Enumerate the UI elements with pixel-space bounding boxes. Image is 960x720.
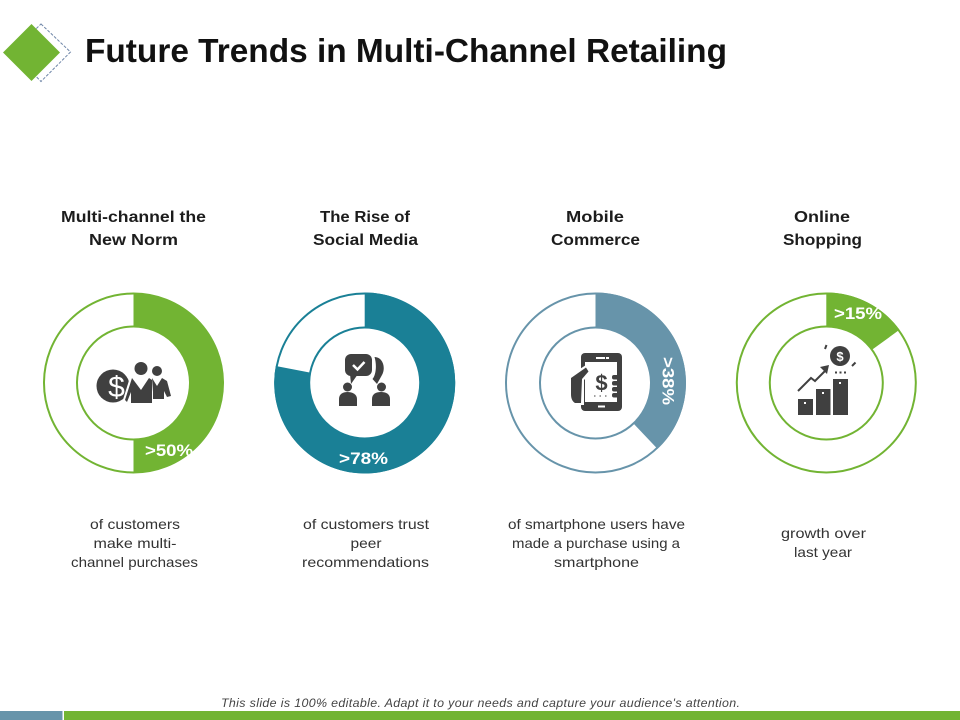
heading: multi-channel: New Norm xyxy=(89,232,178,249)
icon: chat and two people xyxy=(339,354,390,406)
text: mobile commerce description: of smartphone users have xyxy=(508,516,685,532)
text: social media description: recommendations xyxy=(302,554,429,570)
panel: multi-channel xyxy=(44,209,224,570)
heading: online shopping: Shopping xyxy=(783,232,862,249)
donut: 38 percent xyxy=(506,292,686,472)
icon: growth chart and coin xyxy=(798,345,856,415)
heading: mobile commerce xyxy=(551,209,640,249)
donut: 15 percent: >15% xyxy=(834,304,882,323)
icon: dollar and people xyxy=(96,362,171,405)
icon: title diamond xyxy=(3,24,70,82)
heading: social media: Social Media xyxy=(313,232,418,249)
icon: dollar and people: $ xyxy=(108,371,125,404)
footer note: This slide is 100% editable. Adapt it to your needs and capture your audience's attention. xyxy=(221,696,740,710)
text: social media description xyxy=(302,516,429,570)
text: multi-channel description xyxy=(71,516,198,570)
heading: multi-channel xyxy=(61,209,206,249)
icon: phone payment: $ xyxy=(595,370,608,396)
text: mobile commerce description: made a purchase using a xyxy=(512,535,680,551)
text: social media description: of customers trust xyxy=(303,516,429,532)
text: mobile commerce description: smartphone xyxy=(554,554,639,570)
icon: phone payment xyxy=(569,353,622,411)
heading: online shopping: Online xyxy=(794,209,850,226)
text: online shopping description: last year xyxy=(794,544,852,560)
donut: 15 percent xyxy=(737,292,916,472)
heading: multi-channel: Multi-channel the xyxy=(61,209,206,226)
donut: 78 percent xyxy=(274,292,455,474)
donut: 38 percent: >38% xyxy=(658,357,678,405)
icon: growth chart and coin: $ xyxy=(836,349,844,364)
text: mobile commerce description xyxy=(508,516,685,570)
heading: mobile commerce: Commerce xyxy=(551,232,640,249)
panel: social media xyxy=(274,209,455,570)
text: social media description: peer xyxy=(350,535,382,551)
heading: mobile commerce: Mobile xyxy=(566,209,624,226)
text: multi-channel description: make multi- xyxy=(94,535,177,551)
text: multi-channel description: of customers xyxy=(90,516,180,532)
heading: online shopping xyxy=(783,209,862,249)
title: Future Trends in Multi-Channel Retailing xyxy=(85,32,727,69)
panel: online shopping xyxy=(737,209,916,560)
text: multi-channel description: channel purchases xyxy=(71,554,198,570)
footer bar xyxy=(0,711,960,720)
panel: mobile commerce xyxy=(506,209,686,570)
heading: social media xyxy=(313,209,418,249)
text: online shopping description: growth over xyxy=(781,525,866,541)
donut: 50 percent xyxy=(44,293,224,473)
donut: 78 percent: >78% xyxy=(339,449,388,468)
heading: social media: The Rise of xyxy=(320,209,411,226)
donut: 50 percent: >50% xyxy=(145,441,193,460)
text: online shopping description xyxy=(781,525,866,560)
